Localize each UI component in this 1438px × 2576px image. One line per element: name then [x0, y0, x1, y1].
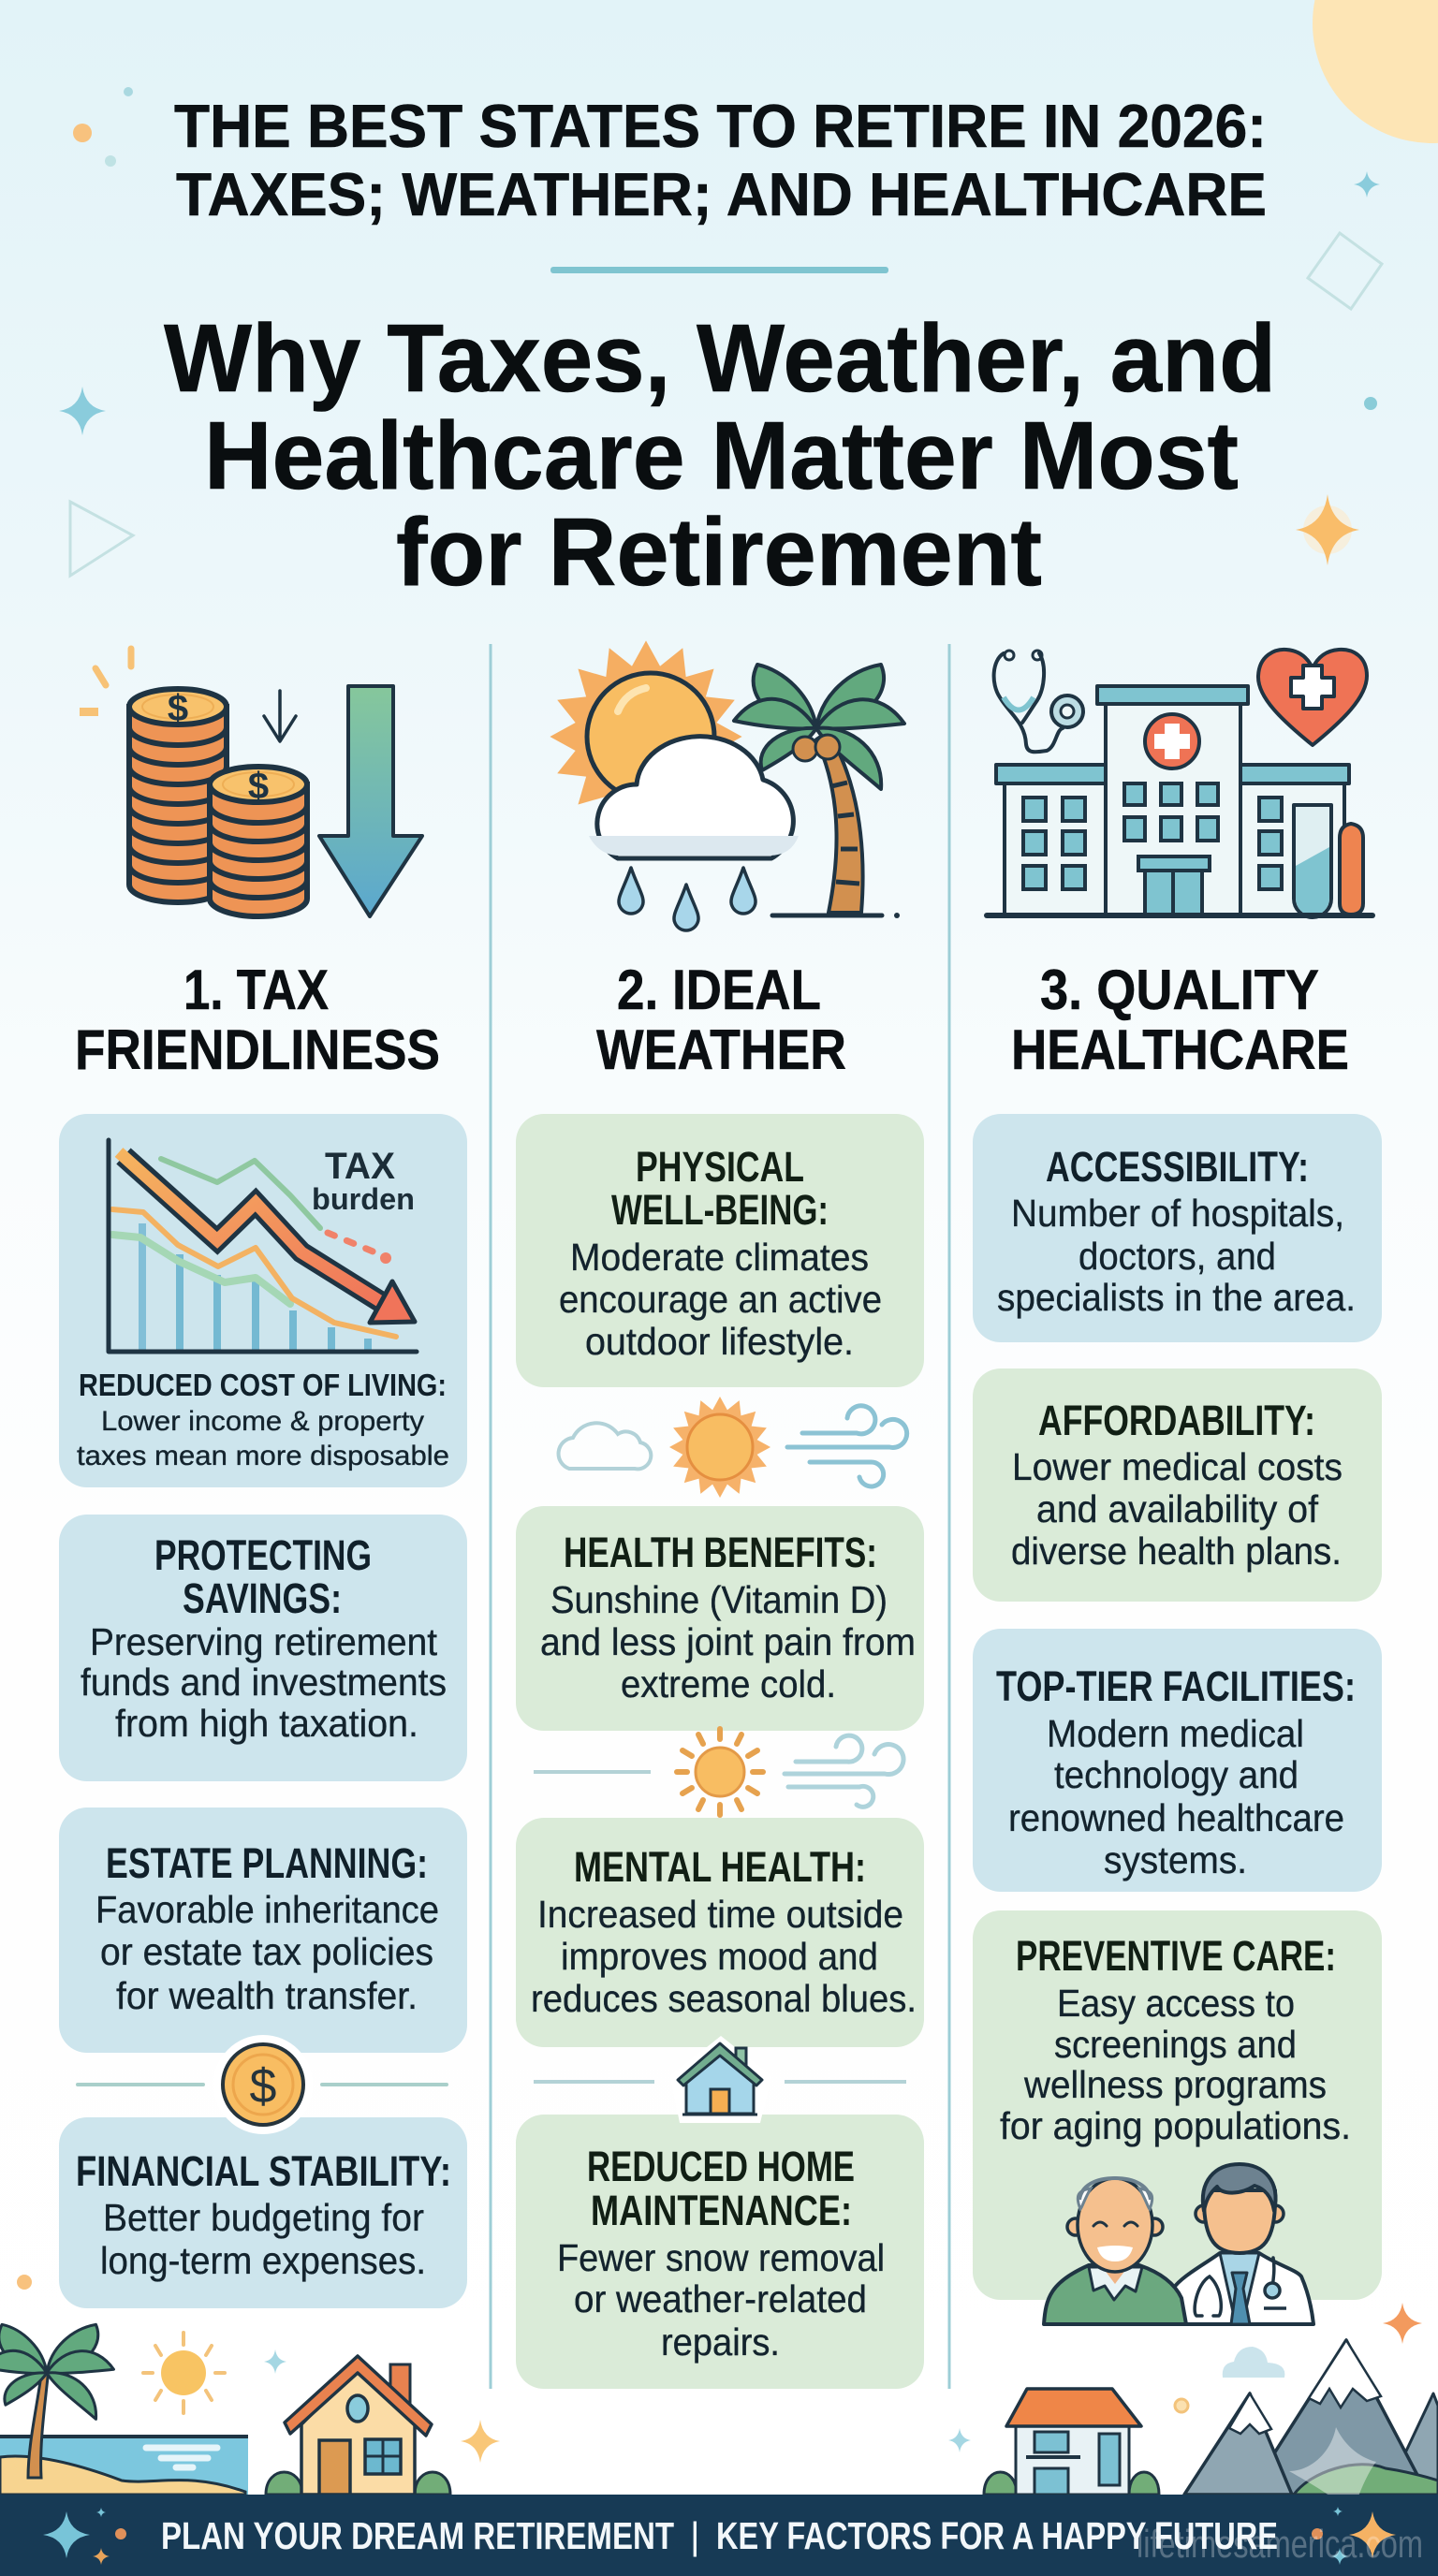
panel: affordability: Lower medical costs	[1012, 1445, 1343, 1488]
column heading: ideal weather: 2. IDEAL	[617, 959, 821, 1021]
icon: coin stacks and down arrow: $	[168, 688, 188, 729]
icon: house divider	[534, 2036, 906, 2123]
panel: preventive care	[973, 1910, 1382, 2300]
panel: health benefits: Sunshine (Vitamin D)	[550, 1578, 888, 1621]
panel: mental health: improves mood and	[561, 1935, 878, 1978]
panel: estate planning	[59, 1808, 467, 2053]
panel: affordability: and availability of	[1036, 1487, 1319, 1530]
panel: reduced home maintenance	[516, 2115, 924, 2389]
footer text: KEY FACTORS FOR A HAPPY FUTURE	[716, 2514, 1278, 2557]
panel: top-tier facilities: Modern medical	[1047, 1712, 1304, 1755]
panel: physical well-being: outdoor lifestyle.	[585, 1320, 854, 1363]
decorative shapes: top of page	[59, 0, 1438, 576]
panel: affordability: diverse health plans.	[1011, 1530, 1342, 1573]
title	[174, 92, 1267, 228]
panel: health benefits: HEALTH BENEFITS:	[564, 1529, 877, 1576]
panel: top-tier facilities: renowned healthcare	[1008, 1796, 1344, 1839]
chart: tax burden falling: TAX	[325, 1146, 395, 1187]
panel: financial stability	[59, 2117, 467, 2308]
icon: hospital, stethoscope and heart	[987, 650, 1372, 917]
panel: top-tier facilities: systems.	[1104, 1838, 1247, 1881]
title rule	[550, 267, 888, 273]
icon: cloud, sun and wind divider	[559, 1397, 907, 1498]
panel: mental health	[516, 1818, 924, 2047]
panel: accessibility: Number of hospitals,	[1011, 1192, 1344, 1235]
panel: physical well-being: PHYSICAL	[636, 1143, 804, 1191]
panel: physical well-being: WELL-BEING:	[611, 1186, 829, 1234]
panel: mental health: Increased time outside	[537, 1893, 903, 1936]
panel: protecting savings: from high taxation.	[115, 1702, 418, 1745]
panel: top-tier facilities: TOP-TIER FACILITIES:	[996, 1662, 1356, 1710]
panel: accessibility: ACCESSIBILITY:	[1046, 1143, 1309, 1191]
icon: dollar coin divider	[78, 2035, 447, 2134]
panel: accessibility: specialists in the area.	[997, 1276, 1356, 1319]
panel: accessibility	[973, 1114, 1382, 1342]
heading	[164, 304, 1276, 606]
panel: health benefits: extreme cold.	[621, 1662, 836, 1705]
title: TAXES; WEATHER; AND HEALTHCARE	[176, 160, 1267, 228]
footer text	[161, 2514, 1278, 2557]
panel: estate planning: Favorable inheritance	[95, 1888, 439, 1931]
panel: physical well-being: encourage an active	[559, 1278, 882, 1321]
panel: reduced home maintenance: Fewer snow removal	[557, 2236, 885, 2279]
panel: reduced home maintenance: MAINTENANCE:	[591, 2187, 852, 2234]
panel: top-tier facilities	[973, 1629, 1382, 1892]
heading: Healthcare Matter Most	[204, 402, 1239, 509]
footer sparkles	[43, 2507, 1396, 2565]
chart: tax burden falling: burden	[312, 1182, 415, 1216]
panel: financial stability: FINANCIAL STABILITY:	[76, 2147, 451, 2195]
chart: tax burden falling	[109, 1140, 417, 1352]
panel: physical well-being: Moderate climates	[570, 1236, 869, 1279]
column heading: tax friendliness	[75, 959, 440, 1081]
panel: protecting savings: funds and investments	[81, 1661, 447, 1704]
panel: financial stability: Better budgeting for	[103, 2196, 424, 2239]
icon: sun and wind divider	[534, 1729, 903, 1815]
footer text: |	[690, 2514, 700, 2557]
panel: protecting savings: SAVINGS:	[183, 1574, 342, 1622]
column heading: ideal weather: WEATHER	[596, 1018, 846, 1081]
column dividers	[491, 644, 949, 2389]
footer band	[0, 2495, 1438, 2576]
scene: house and mountains at bottom right	[948, 2303, 1438, 2515]
panel: health benefits: and less joint pain from	[540, 1620, 916, 1663]
panel: health benefits	[516, 1506, 924, 1731]
scene: beach and house at bottom left	[0, 2275, 500, 2495]
heading: for Retirement	[396, 498, 1042, 606]
panel: physical well-being	[516, 1114, 924, 1387]
panel: estate planning: for wealth transfer.	[116, 1974, 418, 2017]
panel: reduced home maintenance: REDUCED HOME	[587, 2143, 855, 2190]
icon: coin stacks and down arrow	[80, 649, 422, 916]
icon: dollar coin divider: $	[250, 2059, 277, 2114]
title: THE BEST STATES TO RETIRE IN 2026:	[174, 92, 1267, 160]
icon: coin stacks and down arrow: $	[248, 766, 269, 807]
panel: financial stability: long-term expenses.	[100, 2239, 426, 2282]
panel: protecting savings: Preserving retirement	[90, 1620, 438, 1663]
panel: top-tier facilities: technology and	[1054, 1753, 1299, 1796]
panel: mental health: reduces seasonal blues.	[531, 1977, 917, 2020]
panel: protecting savings: PROTECTING	[154, 1531, 372, 1579]
column heading: tax friendliness: FRIENDLINESS	[75, 1018, 440, 1081]
panel: reduced home maintenance: repairs.	[661, 2320, 780, 2364]
panel: reduced cost of living	[59, 1114, 467, 1487]
icon: sun, cloud, rain and palm	[550, 640, 904, 930]
heading: Why Taxes, Weather, and	[164, 304, 1276, 412]
panel: affordability	[973, 1368, 1382, 1602]
panel: estate planning: ESTATE PLANNING:	[106, 1839, 428, 1887]
panel: reduced home maintenance: or weather-related	[574, 2277, 867, 2320]
panel: estate planning: or estate tax policies	[100, 1930, 433, 1973]
panel: protecting savings	[59, 1515, 467, 1781]
panel: affordability: AFFORDABILITY:	[1038, 1397, 1315, 1444]
panel: preventive care: for aging populations.	[1000, 2104, 1351, 2147]
column heading: quality healthcare	[1011, 959, 1349, 1081]
panel: reduced cost of living: REDUCED COST OF LIVING:	[79, 1368, 447, 1402]
panel: mental health: MENTAL HEALTH:	[574, 1843, 866, 1891]
panel: reduced cost of living: taxes mean more disposable	[77, 1441, 449, 1471]
column heading: quality healthcare: 3. QUALITY	[1040, 959, 1319, 1021]
column heading: tax friendliness: 1. TAX	[183, 959, 329, 1021]
footer text: PLAN YOUR DREAM RETIREMENT	[161, 2514, 674, 2557]
panel: reduced cost of living: Lower income & property	[101, 1406, 424, 1437]
icon: retiree and doctor	[1044, 2164, 1313, 2324]
panel: preventive care: Easy access to	[1057, 1982, 1295, 2025]
panel: accessibility: doctors, and	[1078, 1235, 1276, 1278]
column heading: ideal weather	[596, 959, 846, 1081]
panel: preventive care: wellness programs	[1023, 2063, 1327, 2106]
column heading: quality healthcare: HEALTHCARE	[1011, 1018, 1349, 1081]
panel: preventive care: PREVENTIVE CARE:	[1016, 1932, 1336, 1980]
panel: preventive care: screenings and	[1054, 2023, 1297, 2066]
